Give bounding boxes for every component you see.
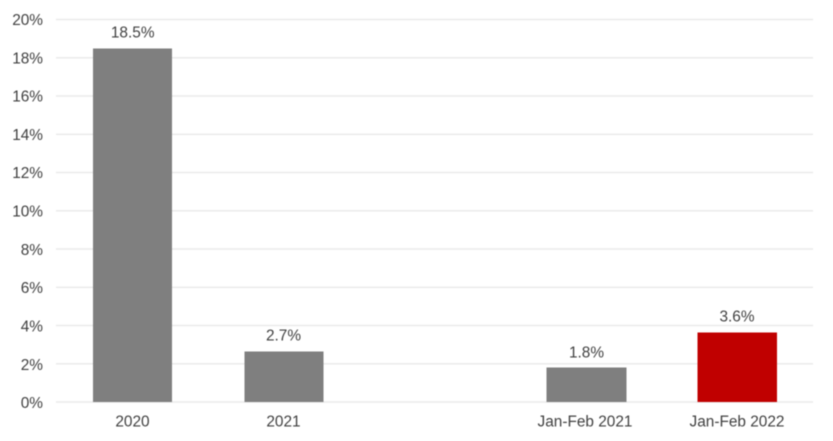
value labels: 2.7% xyxy=(266,328,301,344)
y-axis labels: 8% xyxy=(21,242,43,259)
x-axis labels: Jan-Feb 2022 xyxy=(690,414,784,430)
y-axis labels: 0% xyxy=(21,395,43,412)
y-axis labels xyxy=(12,12,43,412)
bar: 2020 xyxy=(93,48,172,402)
y-axis labels: 6% xyxy=(21,280,43,297)
value labels xyxy=(111,24,755,361)
value labels: 3.6% xyxy=(719,308,755,326)
bar: 2021 xyxy=(244,352,324,402)
value labels: 1.8% xyxy=(569,344,604,361)
y-axis labels: 2% xyxy=(21,357,43,374)
y-axis labels: 16% xyxy=(12,89,43,106)
x-axis labels: Jan-Feb 2021 xyxy=(538,414,632,430)
y-axis labels: 20% xyxy=(12,12,43,29)
x-axis labels: 2020 xyxy=(115,414,150,430)
y-axis labels: 12% xyxy=(12,165,43,182)
x-axis labels xyxy=(115,414,784,430)
y-axis labels: 14% xyxy=(12,127,43,144)
y-axis labels: 10% xyxy=(12,204,43,220)
bar: Jan-Feb 2021 xyxy=(546,368,626,402)
bar: Jan-Feb 2022 xyxy=(698,332,777,402)
y-axis labels: 18% xyxy=(12,50,43,68)
y-axis labels: 4% xyxy=(21,318,43,336)
value labels: 18.5% xyxy=(111,24,155,42)
x-axis labels: 2021 xyxy=(266,414,301,430)
